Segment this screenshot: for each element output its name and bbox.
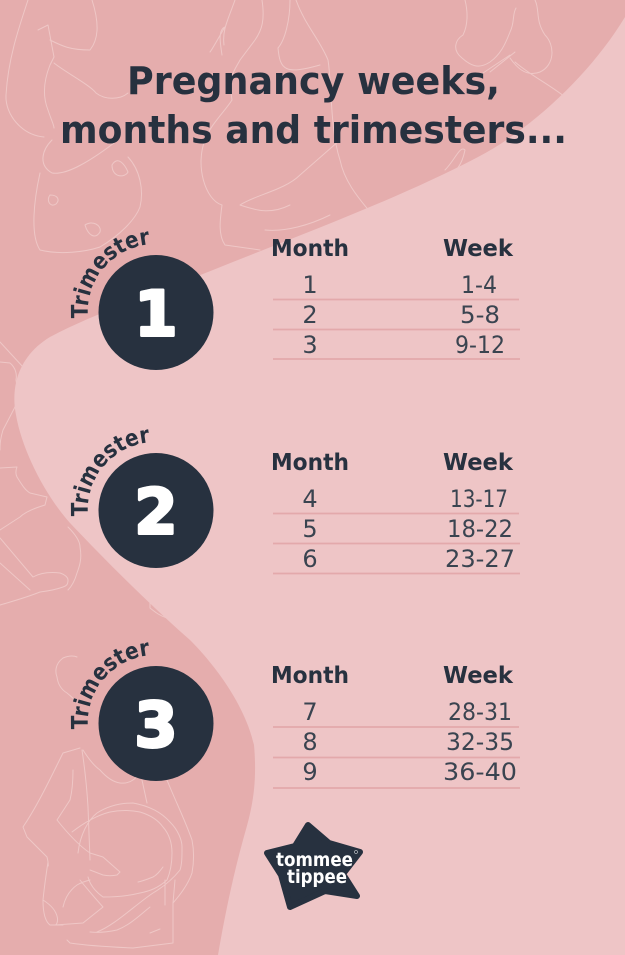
title: months and trimesters... xyxy=(60,108,567,152)
trimester 2 table: 5 xyxy=(302,515,318,543)
trimester 3 table xyxy=(271,663,520,788)
trimester 1 table: 1 xyxy=(302,271,318,299)
trimester 3 table: 8 xyxy=(302,728,318,756)
trimester 2 table: Month xyxy=(271,450,349,476)
trimester 3 table: 36-40 xyxy=(443,758,517,786)
trimester 3 table: Week xyxy=(443,663,514,689)
trimester 2 table: 23-27 xyxy=(445,545,515,573)
trimester 2 badge xyxy=(70,429,214,568)
trimester 1 badge: 1 xyxy=(134,278,178,350)
trimester 2 badge: 2 xyxy=(134,476,178,548)
trimester 1 table: 5-8 xyxy=(460,301,500,329)
trimester 2 table: 18-22 xyxy=(447,515,513,543)
trimester 2 table: 6 xyxy=(302,545,318,573)
trimester 3 table: Month xyxy=(271,663,349,689)
trimester 2 badge: Trimester xyxy=(70,429,149,516)
trimester 1 table: 2 xyxy=(302,301,318,329)
trimester 1 table: 1-4 xyxy=(461,271,497,299)
trimester 3 badge: Trimester xyxy=(70,642,149,730)
trimester 1 table: Week xyxy=(443,236,514,262)
trimester 2 table: 13-17 xyxy=(450,485,508,513)
trimester 2 table xyxy=(271,450,520,574)
trimester 1 table: 9-12 xyxy=(455,331,505,359)
trimester 3 table: 7 xyxy=(302,698,318,726)
trimester 1 badge: Trimester xyxy=(70,231,149,318)
title: Pregnancy weeks, xyxy=(127,59,500,103)
trimester 2 table: Week xyxy=(443,450,514,476)
logo: tommee tippee star: tippee xyxy=(287,866,347,888)
trimester 1 table xyxy=(271,236,520,359)
trimester 1 badge xyxy=(70,231,214,370)
trimester 1 table: 3 xyxy=(302,331,318,359)
trimester 3 badge: 3 xyxy=(134,688,178,762)
logo: tommee tippee star: tommee xyxy=(276,849,353,871)
trimester 2 table: 4 xyxy=(302,485,318,513)
title xyxy=(60,59,567,152)
trimester 3 table: 28-31 xyxy=(448,698,512,726)
trimester 1 table: Month xyxy=(271,236,349,262)
trimester 3 table: 32-35 xyxy=(446,728,514,756)
trimester 3 badge xyxy=(70,642,214,781)
trimester 3 table: 9 xyxy=(302,758,318,786)
logo: tommee tippee star xyxy=(267,825,360,907)
